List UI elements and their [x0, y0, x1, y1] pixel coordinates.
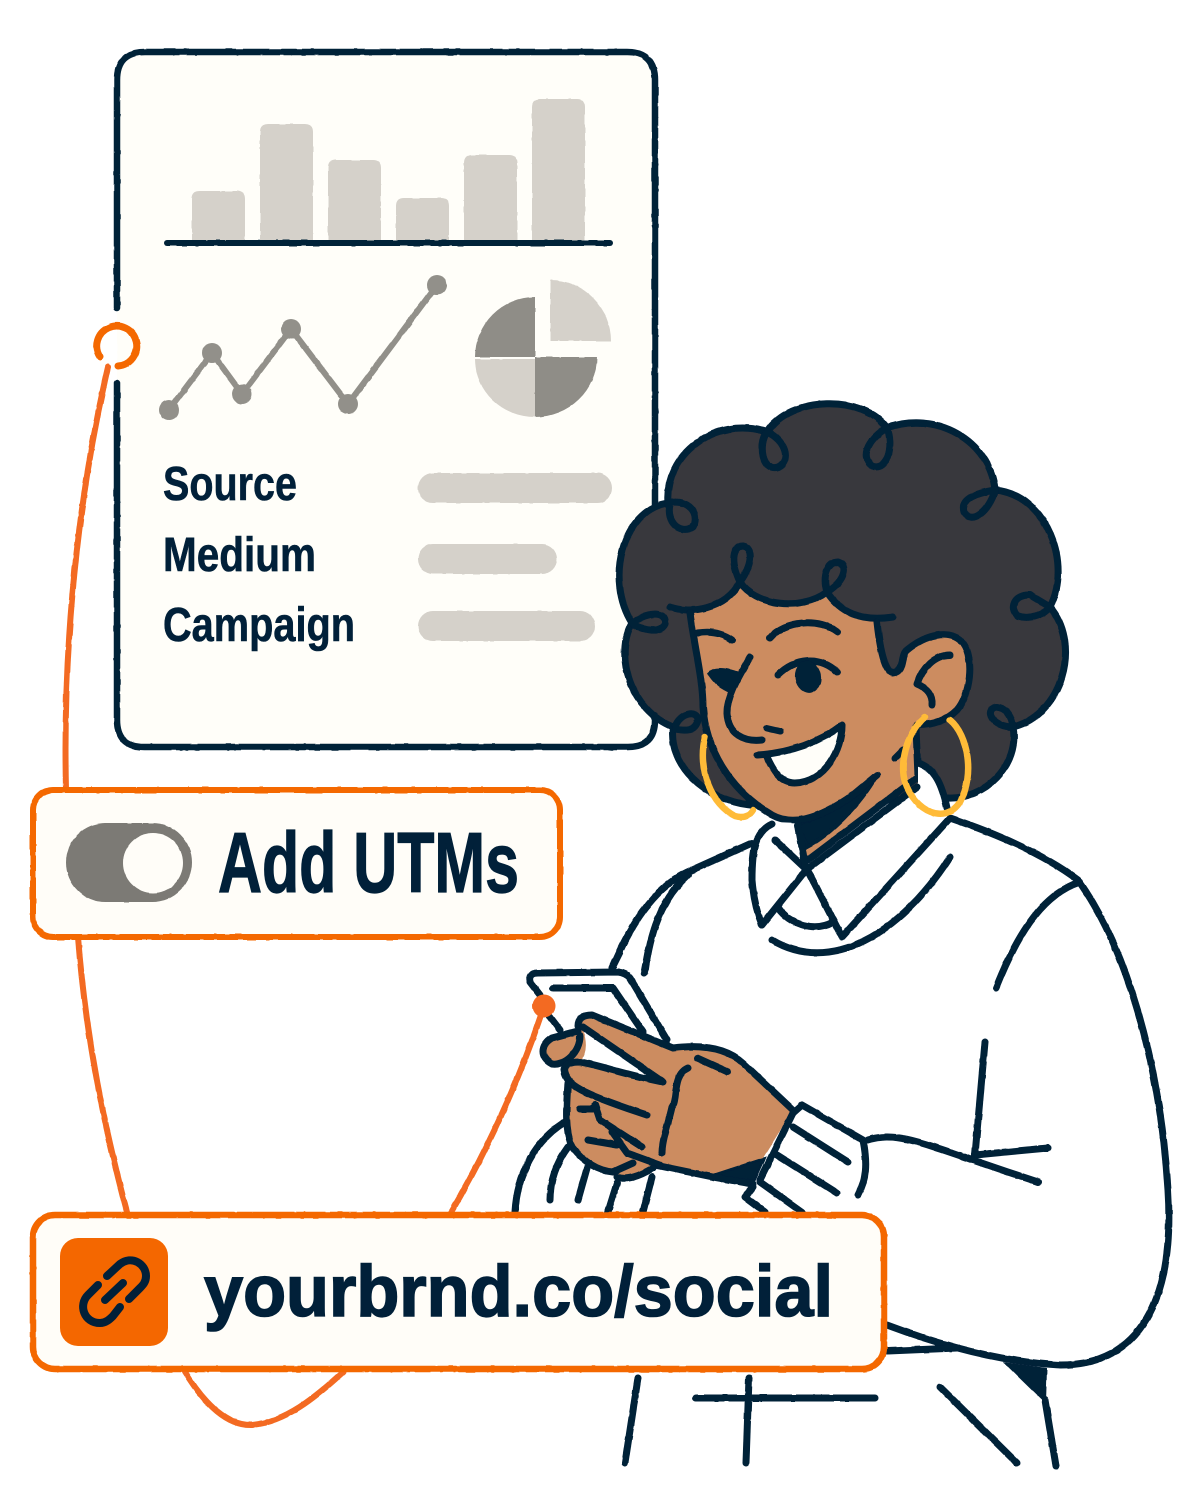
source medium campaign labels: Source — [163, 458, 297, 511]
thumb — [543, 1031, 580, 1064]
woman: face and neck — [670, 546, 970, 860]
source medium campaign labels: Campaign — [163, 599, 355, 652]
orange connector line — [66, 367, 343, 1425]
dashboard card — [117, 52, 655, 747]
bar chart — [167, 99, 610, 243]
gold earrings — [703, 717, 968, 817]
add utms toggle box — [33, 790, 560, 937]
orange line to phone — [450, 994, 556, 1214]
pie chart — [475, 280, 611, 417]
short link url: yourbrnd.co/social — [204, 1252, 833, 1332]
collar — [752, 763, 950, 937]
add utms label: Add UTMs — [218, 816, 519, 911]
source medium campaign labels: Medium — [163, 529, 316, 582]
ring connector node — [97, 326, 137, 366]
hand fill — [543, 1015, 793, 1178]
woman: hair — [619, 404, 1066, 805]
line chart — [159, 275, 447, 420]
source medium campaign labels — [163, 458, 355, 652]
placeholder value bars — [418, 473, 612, 641]
hair curls — [762, 432, 785, 468]
short link box — [33, 1215, 884, 1369]
woman: sweater — [530, 818, 1170, 1466]
eyes — [707, 659, 824, 695]
icon: link — [60, 1238, 168, 1346]
phone and hand — [515, 952, 866, 1212]
sleeve cuff — [745, 1105, 866, 1212]
hairline with forehead curls — [670, 546, 893, 618]
toggle icon — [66, 823, 192, 902]
smile — [757, 725, 842, 783]
